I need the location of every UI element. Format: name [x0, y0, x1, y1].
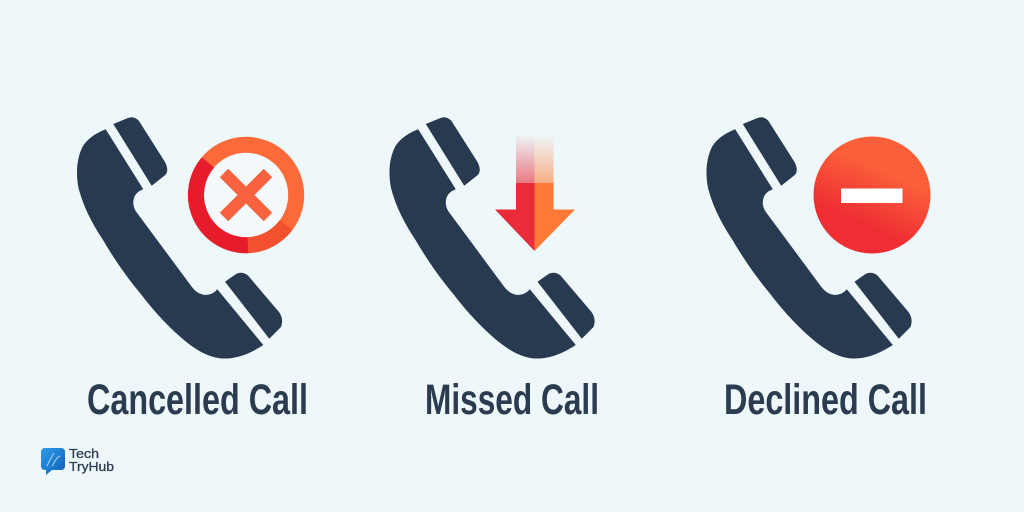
icon: phone handset cancelled — [77, 117, 282, 359]
logo: TechTryHub — [41, 446, 114, 475]
icon: phone handset declined — [706, 117, 912, 359]
label: Cancelled Call: Cancelled Call — [87, 376, 308, 424]
logo text: TryHub — [69, 459, 114, 474]
logo text: Tech — [69, 446, 99, 461]
icon: red ring with cross — [196, 145, 296, 245]
icon: red circle with minus — [814, 136, 930, 254]
icon: phone handset missed — [389, 117, 595, 359]
panel: cancelled call — [77, 117, 308, 424]
label: Declined Call: Declined Call — [724, 376, 927, 424]
panel: missed call — [389, 117, 599, 424]
label: Missed Call: Missed Call — [425, 376, 599, 424]
panel: declined call — [706, 117, 930, 424]
icon: blue chat bubble — [41, 448, 65, 475]
icon: downward arrow — [495, 134, 575, 251]
